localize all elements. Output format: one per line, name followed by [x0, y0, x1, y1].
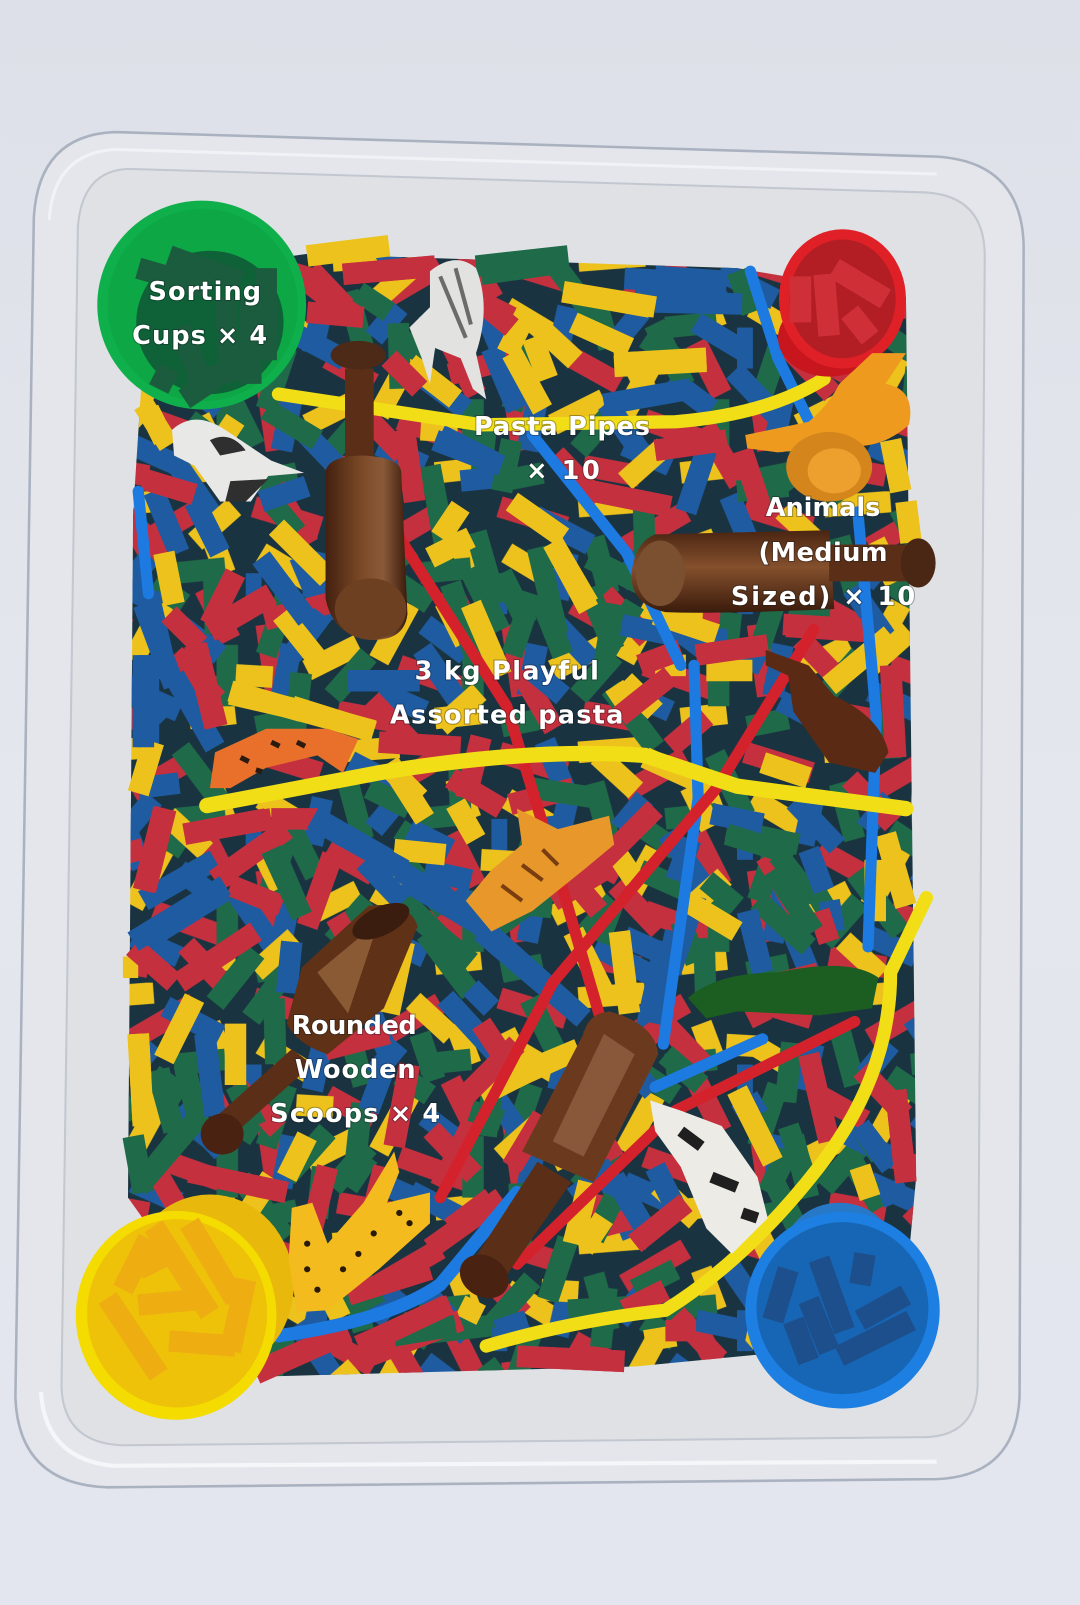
label: pasta pipes [474, 412, 650, 486]
label: pasta pipes: Pasta Pipes [474, 412, 650, 442]
label: sorting cups: Cups × 4 [132, 321, 267, 351]
label: wooden scoops [270, 1011, 440, 1129]
animal: tiger [466, 809, 614, 931]
wooden scoop: lower centre [452, 1011, 658, 1307]
pasta bed [123, 246, 916, 1377]
label: playful assorted pasta: 3 kg Playful [415, 657, 599, 687]
yellow pasta, lower layer [123, 246, 911, 1341]
label: wooden scoops: Scoops × 4 [270, 1099, 440, 1129]
wooden scoop: top left [326, 341, 407, 640]
cup: red [778, 229, 906, 377]
wooden scoop: lower left [201, 895, 418, 1155]
label: sorting cups: Sorting [148, 277, 261, 307]
label: animals: Animals [766, 493, 880, 523]
animal: zebra [409, 260, 486, 399]
label: sorting cups [132, 277, 267, 351]
cup: green [97, 201, 306, 409]
label: playful assorted pasta [390, 657, 623, 731]
animal: hippo [688, 966, 878, 1018]
yellow pipe cleaners [207, 379, 926, 1346]
cup: yellow [76, 1195, 294, 1420]
label: wooden scoops: Rounded [292, 1011, 417, 1041]
label: animals [731, 493, 915, 612]
label: wooden scoops: Wooden [295, 1055, 416, 1085]
label: animals: (Medium [759, 538, 888, 568]
animal: giraffe [745, 353, 910, 452]
animal: leopard, orange [210, 729, 358, 788]
blue pasta, lower layer [138, 278, 906, 1331]
animal: lion [786, 432, 872, 502]
green pasta, lower layer [133, 262, 880, 1336]
wooden scoop: top right [632, 530, 936, 613]
label: playful assorted pasta: Assorted pasta [390, 701, 623, 731]
red pipe cleaners [363, 481, 855, 1264]
label: pasta pipes: × 10 [526, 456, 600, 486]
red pasta, lower layer [133, 266, 906, 1372]
mixed pasta, upper layer [138, 256, 814, 1336]
animal: horse [766, 650, 889, 773]
pipe cleaners [138, 271, 926, 1346]
label: animals: Sized) × 10 [731, 582, 915, 612]
blue pipe cleaners [138, 271, 876, 1336]
cup: blue [745, 1203, 940, 1408]
animal: spotted cow [650, 1100, 768, 1254]
clear plastic tray [15, 132, 1024, 1487]
animal: cow, top left [172, 420, 304, 502]
animal: cheetah [289, 1152, 430, 1312]
